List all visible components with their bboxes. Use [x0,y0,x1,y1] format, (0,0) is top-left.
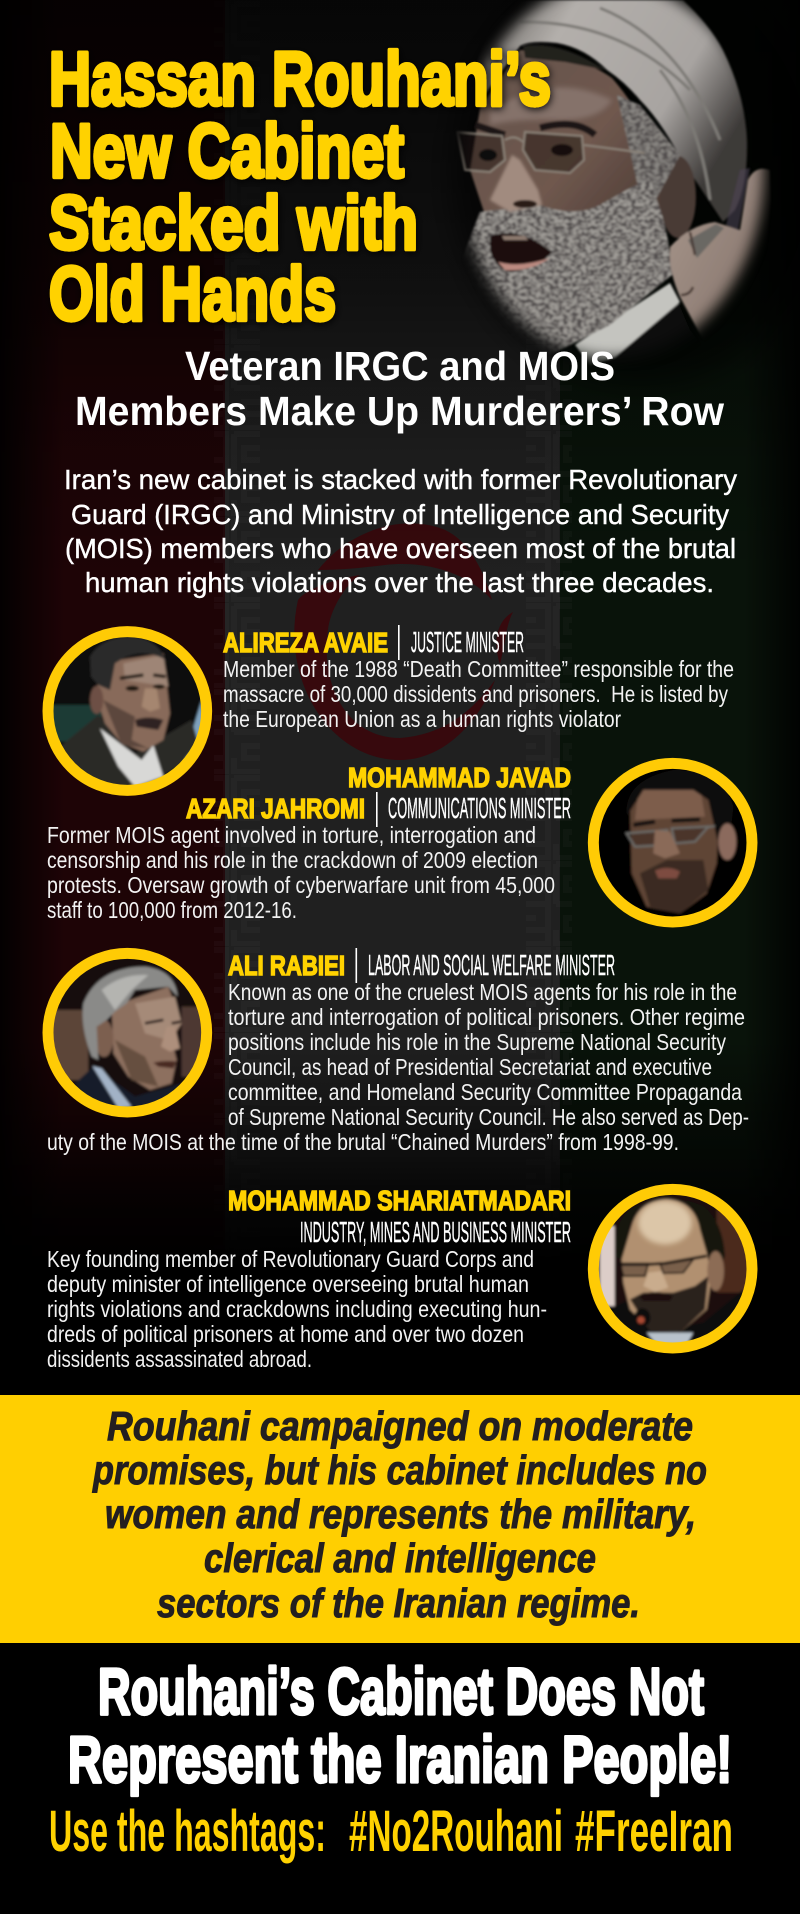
portrait: Ali Rabiei [42,948,212,1118]
description [47,1246,547,1372]
panel: Ali Rabiei [35,940,749,1155]
title: Stacked with [49,181,418,266]
description [47,822,555,923]
nose [490,155,542,212]
name and role [228,948,615,983]
title: New Cabinet [50,109,404,194]
subtitle [75,343,724,434]
closing statement [68,1654,732,1796]
intro paragraph [64,464,737,598]
callout text: clerical and intelligence [204,1535,596,1581]
description: staff to 100,000 from 2012-16. [47,897,297,923]
description: Council, as head of Presidential Secretariat and executive [228,1054,712,1080]
description: deputy minister of intelligence overseeing brutal human [47,1271,529,1297]
description: Former MOIS agent involved in torture, interrogation and [47,822,536,848]
title [49,37,551,337]
description: dissidents assassinated abroad. [47,1346,312,1372]
name and role [186,762,571,827]
face [470,48,662,213]
portrait: Azari Jahromi [588,758,758,928]
sideburn [617,95,680,210]
eyebrows [475,124,595,135]
name and role [223,625,524,660]
subtitle: Members Make Up Murderers’ Row [75,388,724,434]
description: rights violations and crackdowns including executing hun- [47,1296,547,1322]
mouth [490,233,552,272]
description [47,979,749,1155]
hand [668,168,770,334]
name and role: MOHAMMAD SHARIATMADARI [228,1185,571,1216]
callout text: sectors of the Iranian regime. [157,1580,640,1626]
turban [477,0,747,222]
portrait: Hassan Rouhani with raised hand [457,0,771,370]
intro paragraph: Guard (IRGC) and Ministry of Intelligence and Security [71,499,729,530]
name and role: ALIREZA AVAIE [223,627,388,658]
hashtags: Use the hashtags: [49,1799,326,1864]
description: protests. Oversaw growth of cyberwarfare unit from 45,000 [47,872,555,898]
title: Hassan Rouhani’s [49,37,551,122]
subtitle: Veteran IRGC and MOIS [185,343,615,389]
description: the European Union as a human rights violator [223,706,621,732]
callout text: Rouhani campaigned on moderate [107,1403,693,1449]
title: Old Hands [49,252,336,337]
name and role [228,1185,571,1249]
intro paragraph: human rights violations over the last three decades. [85,567,714,598]
panel: yellow callout band [0,1395,800,1643]
description: Key founding member of Revolutionary Guard Corps and [47,1246,534,1272]
portrait: Mohammad Shariatmadari [588,1184,758,1354]
callout text: women and represents the military, [105,1491,696,1537]
name and role: MOHAMMAD JAVAD [348,762,571,793]
description: dreds of political prisoners at home and over two dozen [47,1321,524,1347]
panel: Alireza Avaie [35,620,734,805]
glasses [457,132,645,173]
callout text [92,1403,707,1626]
portrait: Alireza Avaie [42,626,212,796]
name and role: AZARI JAHROMI [186,793,365,824]
panel: Mohammad Shariatmadari [47,1176,765,1372]
headband shading [523,45,605,70]
robe and collar [577,302,687,362]
ear [660,156,696,238]
intro paragraph: Iran’s new cabinet is stacked with former Revolutionary [64,464,737,495]
description: censorship and his role in the crackdown of 2009 election [47,847,538,873]
panel: Alireza Avaie: JUSTICE MINISTER [411,627,524,659]
forehead highlight [490,88,612,125]
beard [458,180,672,355]
panel: Mohammad Javad Azari Jahromi: COMMUNICATIONS MINISTER [388,793,571,825]
description [223,656,734,732]
panel: Mohammad Javad Azari Jahromi [47,750,765,935]
name and role: ALI RABIEI [228,950,345,981]
hashtags: #No2Rouhani [349,1799,563,1864]
eyes [479,149,497,161]
description: uty of the MOIS at the time of the brutal “Chained Murders” from 1998-99. [47,1129,679,1155]
intro paragraph: (MOIS) members who have overseen most of the brutal [65,533,736,564]
